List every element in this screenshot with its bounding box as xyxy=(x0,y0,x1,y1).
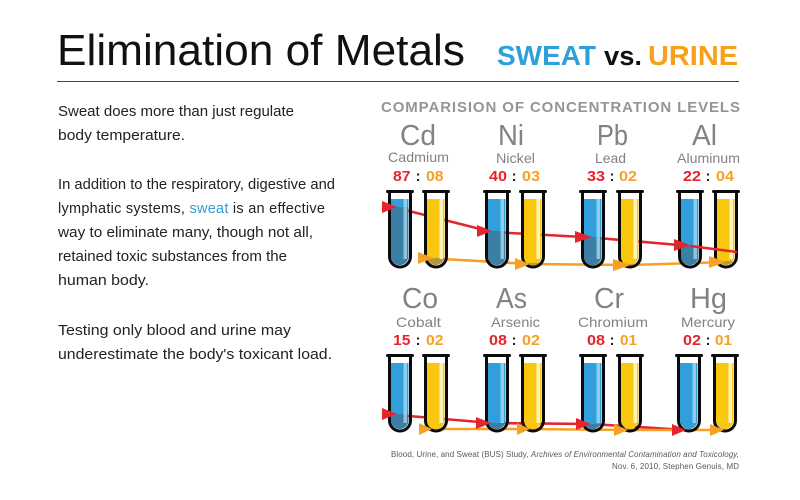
chart heading: COMPARISION OF CONCENTRATION LEVELS xyxy=(381,99,740,116)
intro text xyxy=(57,104,335,363)
element labels row 2: : xyxy=(512,333,516,349)
element labels row 1: : xyxy=(706,169,710,185)
element labels row 1 xyxy=(388,120,740,185)
element labels row 1: 87 xyxy=(393,169,410,185)
element labels row 1: : xyxy=(512,169,516,185)
intro text: way to eliminate many, though not all, xyxy=(57,225,313,241)
element labels row 1: Al xyxy=(692,120,717,152)
intro text: Sweat does more than just regulate xyxy=(58,104,294,120)
title: Elimination of Metals xyxy=(57,26,465,75)
element labels row 2: Hg xyxy=(690,283,727,315)
subtitle: sweat vs urine: SWEAT xyxy=(497,40,596,71)
element labels row 1: 02 xyxy=(619,169,637,185)
element labels row 1: Cd xyxy=(400,120,436,152)
subtitle: sweat vs urine xyxy=(497,40,738,71)
test tubes row 2 xyxy=(386,354,739,432)
element labels row 1: 33 xyxy=(587,169,605,185)
element labels row 2 xyxy=(393,283,735,349)
element labels row 1: 40 xyxy=(489,169,507,185)
element labels row 1: Cadmium xyxy=(388,149,449,165)
element labels row 1: Ni xyxy=(498,120,524,152)
element labels row 2: : xyxy=(706,333,710,349)
element labels row 1: Pb xyxy=(597,120,628,152)
element labels row 2: 01 xyxy=(620,333,637,349)
element labels row 1: : xyxy=(416,169,420,185)
element labels row 2: As xyxy=(496,283,527,315)
element labels row 2: 01 xyxy=(715,333,732,349)
arrows row 1 xyxy=(382,201,737,271)
source note: Blood, Urine, and Sweat (BUS) Study, Archives of Environmental Contamination and Toxicology, xyxy=(391,450,739,459)
element labels row 1: : xyxy=(610,169,614,185)
element labels row 2: 02 xyxy=(683,333,701,349)
test tubes row 1 xyxy=(386,190,740,268)
subtitle: sweat vs urine: URINE xyxy=(648,40,738,71)
intro text: human body. xyxy=(58,273,149,289)
element labels row 2: 08 xyxy=(587,333,605,349)
element labels row 1: 08 xyxy=(426,169,444,185)
intro text: retained toxic substances from the xyxy=(58,249,287,265)
element labels row 2: 02 xyxy=(426,333,444,349)
element labels row 2: 02 xyxy=(522,333,540,349)
element labels row 2: Arsenic xyxy=(491,314,540,330)
element labels row 2: Co xyxy=(402,283,438,315)
intro text: Testing only blood and urine may xyxy=(58,323,292,339)
element labels row 2: Mercury xyxy=(681,314,735,330)
arrows row 2 xyxy=(382,408,724,436)
intro text: In addition to the respiratory, digestive and xyxy=(58,177,335,193)
element labels row 2: 15 xyxy=(393,333,410,349)
element labels row 2: 08 xyxy=(489,333,507,349)
element labels row 2: Cr xyxy=(594,283,624,315)
intro text: lymphatic systems, sweat is an effective xyxy=(58,201,325,217)
element labels row 1: Nickel xyxy=(496,150,535,166)
trend lines row 1 xyxy=(397,208,726,265)
element labels row 1: Lead xyxy=(595,150,626,166)
intro text: underestimate the body's toxicant load. xyxy=(58,347,332,363)
element labels row 1: Aluminum xyxy=(677,150,740,166)
element labels row 2: Chromium xyxy=(578,314,648,330)
element labels row 1: 03 xyxy=(522,169,540,185)
source note: Nov. 6, 2010, Stephen Genuis, MD xyxy=(612,462,739,471)
intro text: body temperature. xyxy=(58,128,185,144)
element labels row 2: : xyxy=(416,333,420,349)
trend lines row 2 xyxy=(397,415,725,430)
element labels row 2: Cobalt xyxy=(396,314,441,330)
subtitle: sweat vs urine: vs. xyxy=(604,41,642,71)
source note xyxy=(391,450,739,471)
element labels row 1: 22 xyxy=(683,169,701,185)
element labels row 1: 04 xyxy=(716,169,734,185)
element labels row 2: : xyxy=(610,333,614,349)
